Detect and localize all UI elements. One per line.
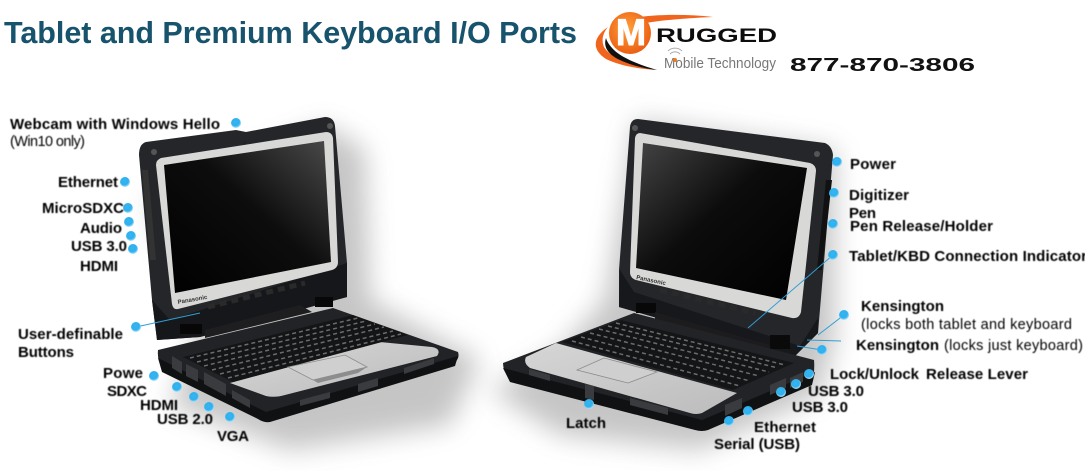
right labels: (locks just keyboard): [944, 338, 1083, 354]
right labels: Ethernet: [754, 419, 816, 436]
right labels: Power: [850, 156, 896, 173]
left labels: SDXC: [107, 383, 147, 400]
bezel: [156, 132, 338, 309]
left labels: Webcam with Windows Hello: [10, 116, 220, 133]
left labels: Audio: [80, 220, 122, 237]
right labels: Lock/Unlock: [830, 366, 920, 383]
left labels: User-definable: [18, 326, 123, 343]
right labels: Release Lever: [926, 366, 1028, 383]
right labels: Pen: [849, 205, 876, 222]
left labels: HDMI: [140, 397, 178, 414]
bezel: [630, 133, 816, 318]
side ports: [529, 369, 803, 416]
logo: Rugged Mobile Technology: Mobile Technology: [664, 55, 776, 72]
leader lines: [136, 255, 844, 350]
keyboard: [183, 315, 408, 382]
left labels: Ethernet: [58, 174, 118, 191]
phone number: 877-870-3806: [790, 55, 975, 75]
logo: Rugged Mobile Technology: [596, 12, 777, 72]
left labels: USB 3.0: [71, 238, 127, 255]
base: [158, 308, 459, 418]
keyboard: [562, 320, 794, 390]
right labels: USB 3.0: [808, 383, 864, 400]
right labels: (locks both tablet and keyboard: [861, 317, 1072, 333]
side ports: [172, 356, 434, 408]
palm rest: [230, 342, 439, 397]
lid: [619, 119, 833, 357]
left labels: MicroSDXC: [42, 200, 124, 217]
left labels: (Win10 only): [10, 134, 85, 150]
right labels: [566, 156, 1085, 453]
palm rest: [525, 343, 737, 414]
right labels: Latch: [566, 415, 606, 432]
right laptop: [490, 119, 835, 450]
right labels: Pen Release/Holder: [850, 218, 993, 235]
lid: [139, 117, 347, 340]
left labels: Powe: [103, 365, 143, 382]
screen: [164, 141, 331, 293]
trackpad: [288, 355, 367, 380]
title: Tablet and Premium Keyboard I/O Ports: [4, 16, 577, 50]
screen: [636, 143, 807, 300]
trackpad: [577, 358, 657, 383]
right labels: Serial (USB): [714, 436, 800, 453]
right labels: Digitizer: [849, 187, 909, 204]
right labels: Tablet/KBD Connection Indicator: [849, 248, 1085, 265]
left laptop: [139, 117, 480, 450]
left labels: [10, 116, 249, 445]
left labels: VGA: [217, 428, 249, 445]
right laptop: Panasonic: [636, 275, 667, 287]
base: [503, 313, 814, 427]
left laptop: Panasonic: [177, 295, 209, 306]
right labels: Kensington: [861, 298, 944, 315]
left labels: USB 2.0: [157, 411, 213, 428]
callout dots: [120, 118, 849, 426]
left labels: HDMI: [80, 258, 118, 275]
hinges: [180, 324, 202, 334]
right labels: Kensington: [856, 337, 939, 354]
logo: Rugged Mobile Technology: M: [616, 12, 646, 53]
left labels: Buttons: [18, 344, 74, 361]
logo: Rugged Mobile Technology: RUGGED: [656, 25, 777, 47]
right labels: USB 3.0: [792, 399, 848, 416]
hinges: [636, 303, 656, 313]
